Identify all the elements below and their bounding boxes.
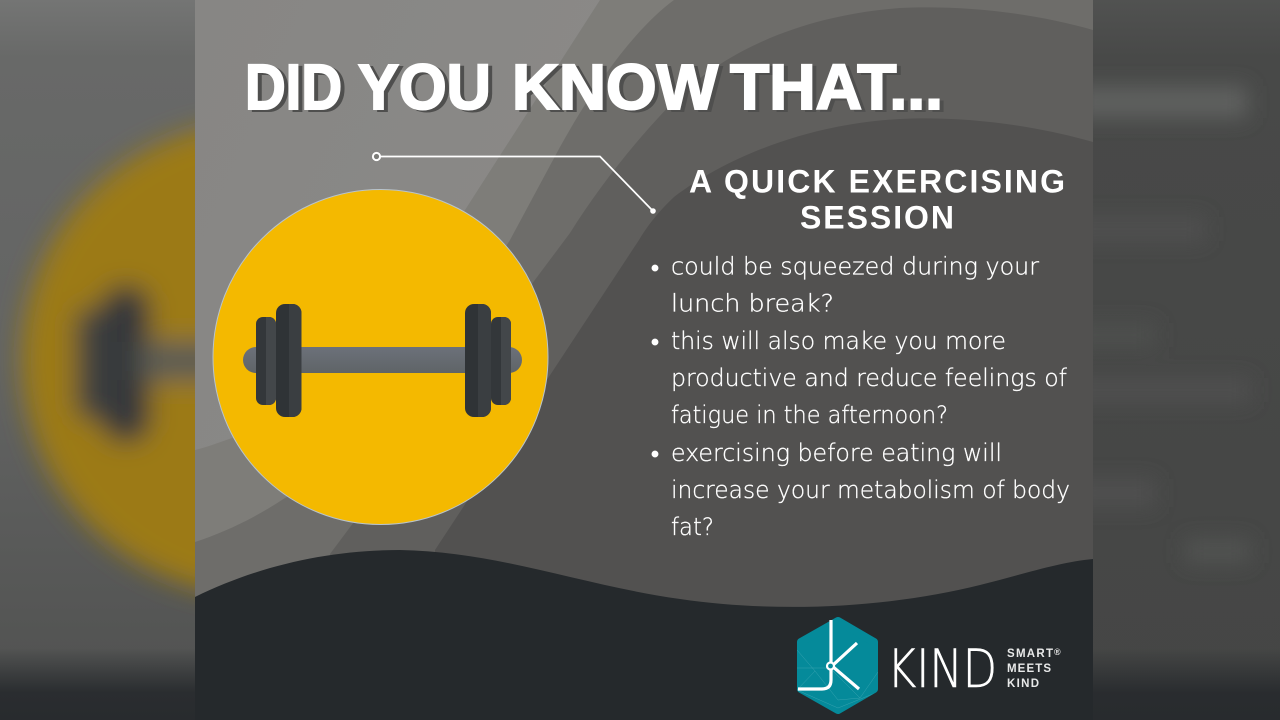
dumbbell bar [243,347,522,373]
title text [245,51,943,123]
left small plate [256,317,276,405]
right small plate [491,317,511,405]
panel: blurred left backdrop [0,0,195,720]
tagline: ® [1054,647,1061,657]
title text: THAT... [730,51,943,123]
title [245,51,947,125]
title shadow: DID [249,53,346,125]
bullet 2: this will also make you more [671,327,1006,355]
tagline: SMART [1007,648,1053,660]
logo: KIND [797,620,1061,710]
dark bottom wave [195,550,1093,720]
tagline: KIND [1007,678,1039,690]
tagline: MEETS [1007,663,1051,675]
bullet 2: productive and reduce feelings of [671,364,1068,392]
wave layer 3 [330,8,1093,555]
tagline [1007,647,1061,690]
title shadow [249,53,947,125]
title text: YOU [358,51,491,123]
bullet 1: could be squeezed during your [671,252,1039,280]
title shadow: THAT... [734,53,947,125]
wordmark KIND: KIND [887,639,997,700]
heading: a quick exercising session: A QUICK EXERCISING [689,164,1065,200]
connector line [373,153,656,214]
wave layer 4 [435,118,1093,607]
heading: a quick exercising session [689,164,1065,236]
wave layer 1 [195,0,674,542]
title shadow: YOU [362,53,495,125]
bullet 1: lunch break? [671,290,834,318]
panel: central card with layered waves [195,0,1093,720]
title text: DID [245,51,342,123]
wave layer 2 [195,0,1093,597]
bullet 3 [652,439,1070,541]
bullet 3: fat? [671,513,714,541]
bullet 1 [652,252,1039,318]
bullet 2 [652,327,1068,429]
heading: a quick exercising session: SESSION [800,200,954,236]
text block: bullet list [652,252,1070,541]
right large plate [465,304,491,417]
bullet 2: fatigue in the afternoon? [671,401,948,429]
icon: teal hexagon with K mark [797,620,878,710]
title text: KNOW [512,51,719,123]
panel: blurred right backdrop [1093,84,1280,720]
left large plate [276,304,302,417]
icon: dumbbell in yellow circle [213,190,548,524]
bullet 3: increase your metabolism of body [671,476,1070,504]
bullet 3: exercising before eating will [671,439,1002,467]
title shadow: KNOW [516,53,723,125]
